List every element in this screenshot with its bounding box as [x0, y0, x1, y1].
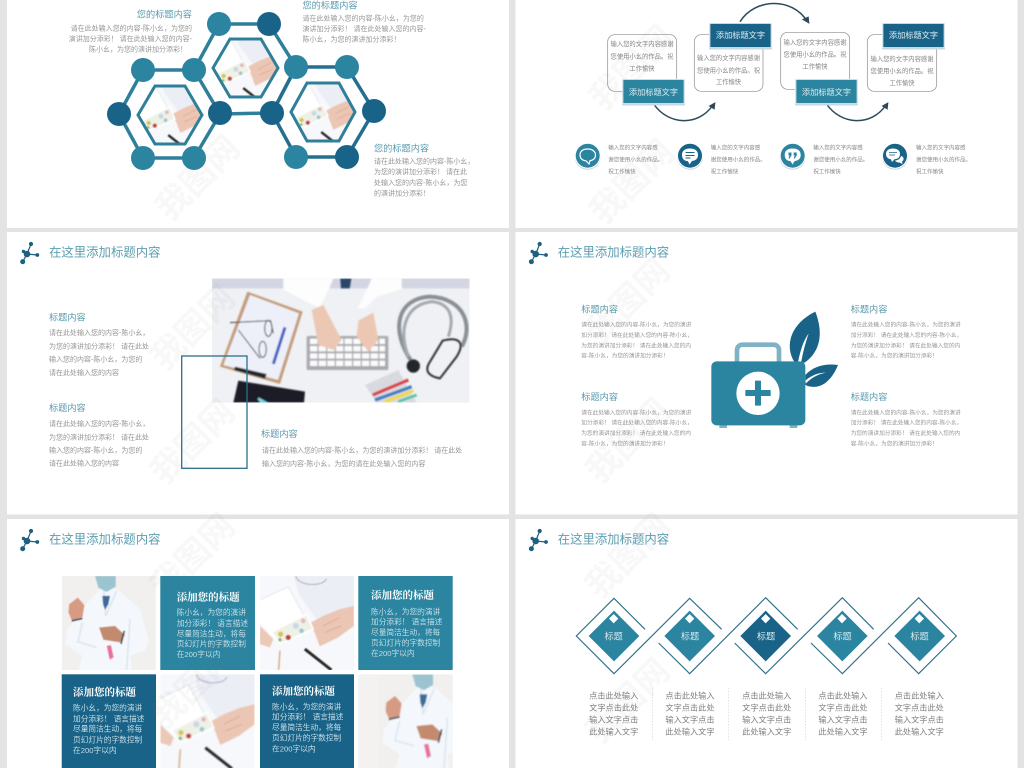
icon: molecule logo	[21, 529, 39, 551]
text block: lower right	[851, 391, 962, 447]
outlined square frame	[182, 356, 247, 468]
text block: third	[261, 428, 462, 468]
heading: 在这里添加标题内容	[49, 532, 161, 546]
icon captions: 祝工作愉快	[711, 167, 739, 175]
tile: text dark right: 添加您的标题	[272, 684, 335, 697]
photo: pill box second	[160, 674, 255, 768]
watermarks: 我图网	[576, 12, 683, 119]
text block: lower left: 标题内容	[581, 391, 618, 402]
box text: 工作愉快	[802, 62, 828, 70]
text block: lower right: 请在此处输入您的内容-陈小幺，为您的演讲	[851, 408, 961, 416]
text block: bottom right: 您的标题内容	[374, 142, 429, 154]
diamond labels	[605, 630, 929, 642]
column text: 输入文字点击	[818, 714, 868, 724]
column text: 点击此处输入	[818, 690, 868, 700]
tile: text light	[160, 576, 255, 670]
text block: second: 标题内容	[49, 402, 86, 413]
text block: bottom right	[374, 142, 474, 198]
panel: photo grid slide	[7, 519, 509, 768]
text block: upper right: 标题内容	[851, 304, 887, 314]
column text: 输入文字点击	[895, 714, 944, 724]
text block: third: 标题内容	[261, 428, 298, 439]
hexagon network	[107, 12, 386, 170]
tile: text dark: 在200字以内	[73, 745, 117, 755]
column text: 文字点击此处	[665, 702, 715, 712]
icon captions: 谢您使用小幺的作品。	[813, 155, 868, 163]
icon captions: 输入您的文字内容感	[608, 143, 658, 151]
icon: molecule logo	[529, 529, 547, 551]
icon: molecule logo	[21, 242, 39, 264]
text block: upper right: 为您的演讲加分添彩！ 请在此处输入您的内	[851, 341, 961, 349]
tile: text dark right: 陈小幺，为您的演讲	[272, 701, 342, 711]
text block: top left: 陈小幺，为您的演讲加分添彩！	[89, 44, 187, 54]
text block: upper left: 标题内容	[581, 304, 618, 314]
tile: text light: 在200字以内	[177, 649, 220, 659]
icon captions: 祝工作愉快	[608, 167, 636, 175]
text block: second: 为您的演讲加分添彩！ 请在此处	[49, 432, 149, 441]
column text: 此处输入文字	[665, 726, 715, 736]
box text: 您使用小幺的作品。祝	[784, 50, 847, 58]
text block: lower left: 加分添彩！ 请在此处输入您的内容-陈小幺，	[581, 419, 693, 427]
tile: text light right: 尽量简洁生动，将每	[371, 627, 441, 637]
hexagon photo left	[136, 84, 204, 146]
tile: text dark: 陈小幺，为您的演讲	[73, 702, 143, 712]
icon: speech bubble lines	[677, 143, 703, 170]
tile: text light: 添加您的标题	[177, 590, 240, 604]
text block: top right: 请在此处输入您的内容-陈小幺，为您的	[302, 14, 424, 22]
text block: first: 输入您的内容-陈小幺，为您的	[49, 354, 142, 364]
icon captions: 输入您的文字内容感	[916, 143, 966, 151]
text block: top right: 陈小幺，为您的演讲加分添彩！	[302, 34, 400, 44]
hexagon photo top	[211, 38, 280, 98]
watermarks: 我图网	[572, 245, 679, 352]
column text: 输入文字点击	[742, 714, 791, 724]
text block: second	[49, 402, 149, 467]
text block: top right: 演讲加分添彩！ 请在此处输入您的内容-	[302, 24, 426, 33]
box text: 输入您的文字内容感谢	[611, 39, 674, 48]
heading: 在这里添加标题内容	[558, 532, 669, 546]
heading: 在这里添加标题内容	[558, 244, 669, 260]
text block: upper left: 为您的演讲加分添彩！ 请在此处输入您的内	[581, 341, 691, 349]
text block: first: 为您的演讲加分添彩！ 请在此处	[49, 341, 149, 350]
watermarks: 我图网	[576, 126, 683, 233]
tile: text light: 加分添彩！ 语言描述	[177, 618, 248, 628]
panel: process slide	[516, 0, 1018, 228]
panel: medical kit slide	[516, 232, 1018, 514]
icon: two speech bubbles	[882, 143, 908, 170]
text block: lower left: 容-陈小幺，为您的演讲加分添彩！	[581, 439, 669, 447]
photo: doctor	[62, 576, 156, 670]
diamond labels: 标题	[757, 630, 775, 642]
column text: 文字点击此处	[589, 702, 638, 712]
text block: second: 输入您的内容-陈小幺，为您的	[49, 445, 142, 454]
text block: upper right	[851, 304, 962, 360]
column text: 点击此处输入	[895, 690, 944, 700]
diamond labels: 标题	[910, 630, 929, 642]
watermarks: 我图网	[572, 645, 679, 752]
text block: second: 请在此处输入您的内容-陈小幺，	[49, 419, 149, 428]
column text: 点击此处输入	[742, 690, 791, 700]
text block: lower right: 标题内容	[851, 391, 887, 402]
icon: medical kit with leaves	[711, 312, 838, 428]
watermarks: 我图网	[572, 385, 679, 492]
text block: top left: 请在此处输入您的内容-陈小幺，为您的	[71, 24, 192, 32]
tile: text dark right	[260, 674, 354, 768]
column text: 点击此处输入	[589, 690, 638, 700]
tile: text dark right: 加分添彩！ 语言描述	[272, 712, 344, 722]
tile: text light: 尽量简洁生动，将每	[177, 629, 246, 639]
step boxes with text	[608, 32, 937, 91]
text block: third: 请在此处输入您的内容-陈小幺，为您的演讲加分添彩！ 请在此处	[262, 446, 462, 454]
column text: 输入文字点击	[589, 714, 638, 724]
icon captions: 祝工作愉快	[916, 167, 944, 175]
text block: third: 输入您的内容-陈小幺，为您的请在此处输入您的内容	[262, 459, 425, 468]
text block: first: 请在此处输入您的内容-陈小幺，	[49, 328, 149, 337]
box text: 工作愉快	[889, 78, 915, 87]
column text: 此处输入文字	[742, 726, 791, 736]
text block: top left	[69, 8, 193, 54]
column text	[589, 690, 944, 736]
icon captions: 祝工作愉快	[813, 167, 841, 175]
text block: upper right: 请在此处输入您的内容-陈小幺，为您的演讲	[851, 321, 961, 329]
text block: first: 请在此处输入您的内容	[49, 368, 119, 377]
tile: text light right: 添加您的标题	[371, 589, 434, 602]
text block: lower right: 容-陈小幺，为您的演讲加分添彩！	[851, 439, 938, 447]
text block: upper right: 容-陈小幺，为您的演讲加分添彩！	[851, 352, 938, 360]
box text	[611, 38, 934, 87]
title labels: 添加标题文字	[716, 30, 765, 40]
tile: text dark	[62, 674, 156, 768]
tile: text light right: 在200字以内	[371, 648, 415, 658]
text block: upper left: 加分添彩！ 请在此处输入您的内容-陈小幺，	[581, 331, 693, 339]
text block: lower left	[581, 391, 693, 447]
box text: 您使用小幺的作品。祝	[871, 66, 934, 75]
tile: text dark: 尽量简洁生动，将每	[73, 724, 143, 734]
photo: pill box	[260, 576, 354, 670]
text block: upper right: 加分添彩！ 请在此处输入您的内容-陈小幺，	[851, 331, 962, 339]
title labels: 添加标题文字	[889, 30, 938, 40]
text block: bottom right: 处输入您的内容-陈小幺，为您	[374, 178, 467, 187]
panel: diamonds slide	[516, 519, 1018, 768]
column text: 此处输入文字	[895, 726, 944, 736]
diamond labels: 标题	[605, 630, 623, 642]
arrows	[654, 3, 888, 121]
column text: 输入文字点击	[665, 714, 715, 724]
text block: upper left: 请在此处输入您的内容-陈小幺，为您的演讲	[581, 321, 692, 329]
tile: text dark: 页幻灯片的字数控制	[73, 735, 143, 745]
box text: 输入您的文字内容感谢	[697, 53, 761, 62]
icon: speech bubble quotes	[780, 143, 806, 170]
photo: desk with keyboard and stethoscope	[212, 278, 470, 403]
panel: hexagon slide	[7, 0, 509, 228]
watermarks: 我图网	[137, 272, 244, 379]
diamond labels: 标题	[681, 630, 699, 642]
diamond chain	[576, 598, 956, 674]
column text: 此处输入文字	[589, 726, 638, 736]
text block: top left: 您的标题内容	[137, 8, 192, 20]
hexagon photo right	[289, 82, 357, 142]
box text: 输入您的文字内容感谢	[784, 38, 847, 46]
panel: photo and text slide	[7, 232, 509, 514]
photo: doctor second	[358, 674, 453, 768]
icon: molecule logo	[529, 242, 547, 264]
column text: 文字点击此处	[742, 702, 791, 712]
tile: text light right: 加分添彩！ 语言描述	[371, 617, 443, 627]
icon: speech bubble outline	[575, 143, 601, 170]
text block: top right	[302, 0, 426, 44]
icon captions: 谢您使用小幺的作品。	[711, 155, 766, 163]
text block: lower right: 加分添彩！ 请在此处输入您的内容-陈小幺，	[851, 419, 962, 427]
title labels: 添加标题文字	[802, 87, 851, 97]
watermarks: 我图网	[137, 386, 244, 493]
tile: text light right	[358, 576, 453, 670]
box text: 您使用小幺的作品。祝	[611, 52, 674, 60]
watermarks: 我图网	[137, 500, 244, 607]
title labels	[622, 23, 945, 106]
icon captions	[608, 143, 971, 175]
text block: upper left: 容-陈小幺，为您的演讲加分添彩！	[581, 352, 669, 360]
text block: top left: 演讲加分添彩！ 请在此处输入您的内容-	[69, 34, 193, 43]
watermarks	[137, 12, 683, 752]
tile: text light: 陈小幺，为您的演讲	[177, 607, 246, 617]
icon captions: 谢您使用小幺的作品。	[608, 155, 663, 163]
text block: bottom right: 为您的演讲加分添彩！ 请在此	[374, 167, 467, 176]
box text: 输入您的文字内容感谢	[871, 54, 934, 63]
diamond labels: 标题	[833, 630, 852, 642]
text block: lower left: 为您的演讲加分添彩！ 请在此处输入您的内	[581, 429, 691, 437]
column text: 此处输入文字	[818, 726, 868, 736]
box text: 工作愉快	[716, 77, 742, 86]
title labels: 添加标题文字	[629, 87, 678, 97]
box text: 您使用小幺的作品。祝	[697, 66, 761, 74]
tile: text dark: 加分添彩！ 语言描述	[73, 714, 145, 724]
column text: 点击此处输入	[665, 690, 715, 700]
text block: top right: 您的标题内容	[302, 0, 358, 10]
heading: 在这里添加标题内容	[49, 244, 161, 260]
tile: text dark right: 尽量简洁生动，将每	[272, 722, 342, 732]
box text: 工作愉快	[629, 64, 655, 72]
text block: lower left: 请在此处输入您的内容-陈小幺，为您的演讲	[581, 408, 692, 416]
tile: text light right: 页幻灯片的字数控制	[371, 638, 441, 648]
watermarks: 我图网	[137, 630, 244, 737]
watermarks: 我图网	[142, 122, 249, 229]
text block: second: 请在此处输入您的内容	[49, 458, 119, 467]
text block: upper left	[581, 304, 693, 360]
text block: lower right: 为您的演讲加分添彩！ 请在此处输入您的内	[851, 429, 961, 437]
watermarks: 我图网	[572, 500, 679, 607]
tile: text light right: 陈小幺，为您的演讲	[371, 606, 441, 616]
tile: text light: 页幻灯片的字数控制	[177, 639, 246, 649]
text block: bottom right: 的演讲加分添彩！	[374, 188, 430, 198]
text block: bottom right: 请在此处输入您的内容-陈小幺，	[374, 156, 474, 166]
text block: first	[49, 312, 149, 377]
tile: text dark right: 在200字以内	[272, 743, 316, 753]
column text: 文字点击此处	[818, 702, 868, 712]
tile: text dark: 添加您的标题	[73, 685, 136, 698]
text block: first: 标题内容	[49, 312, 86, 322]
icon captions: 谢您使用小幺的作品。	[916, 155, 971, 163]
icon captions: 输入您的文字内容感	[711, 143, 761, 151]
column text: 文字点击此处	[895, 702, 944, 712]
icon captions: 输入您的文字内容感	[813, 143, 863, 151]
tile: text dark right: 页幻灯片的字数控制	[272, 733, 342, 743]
